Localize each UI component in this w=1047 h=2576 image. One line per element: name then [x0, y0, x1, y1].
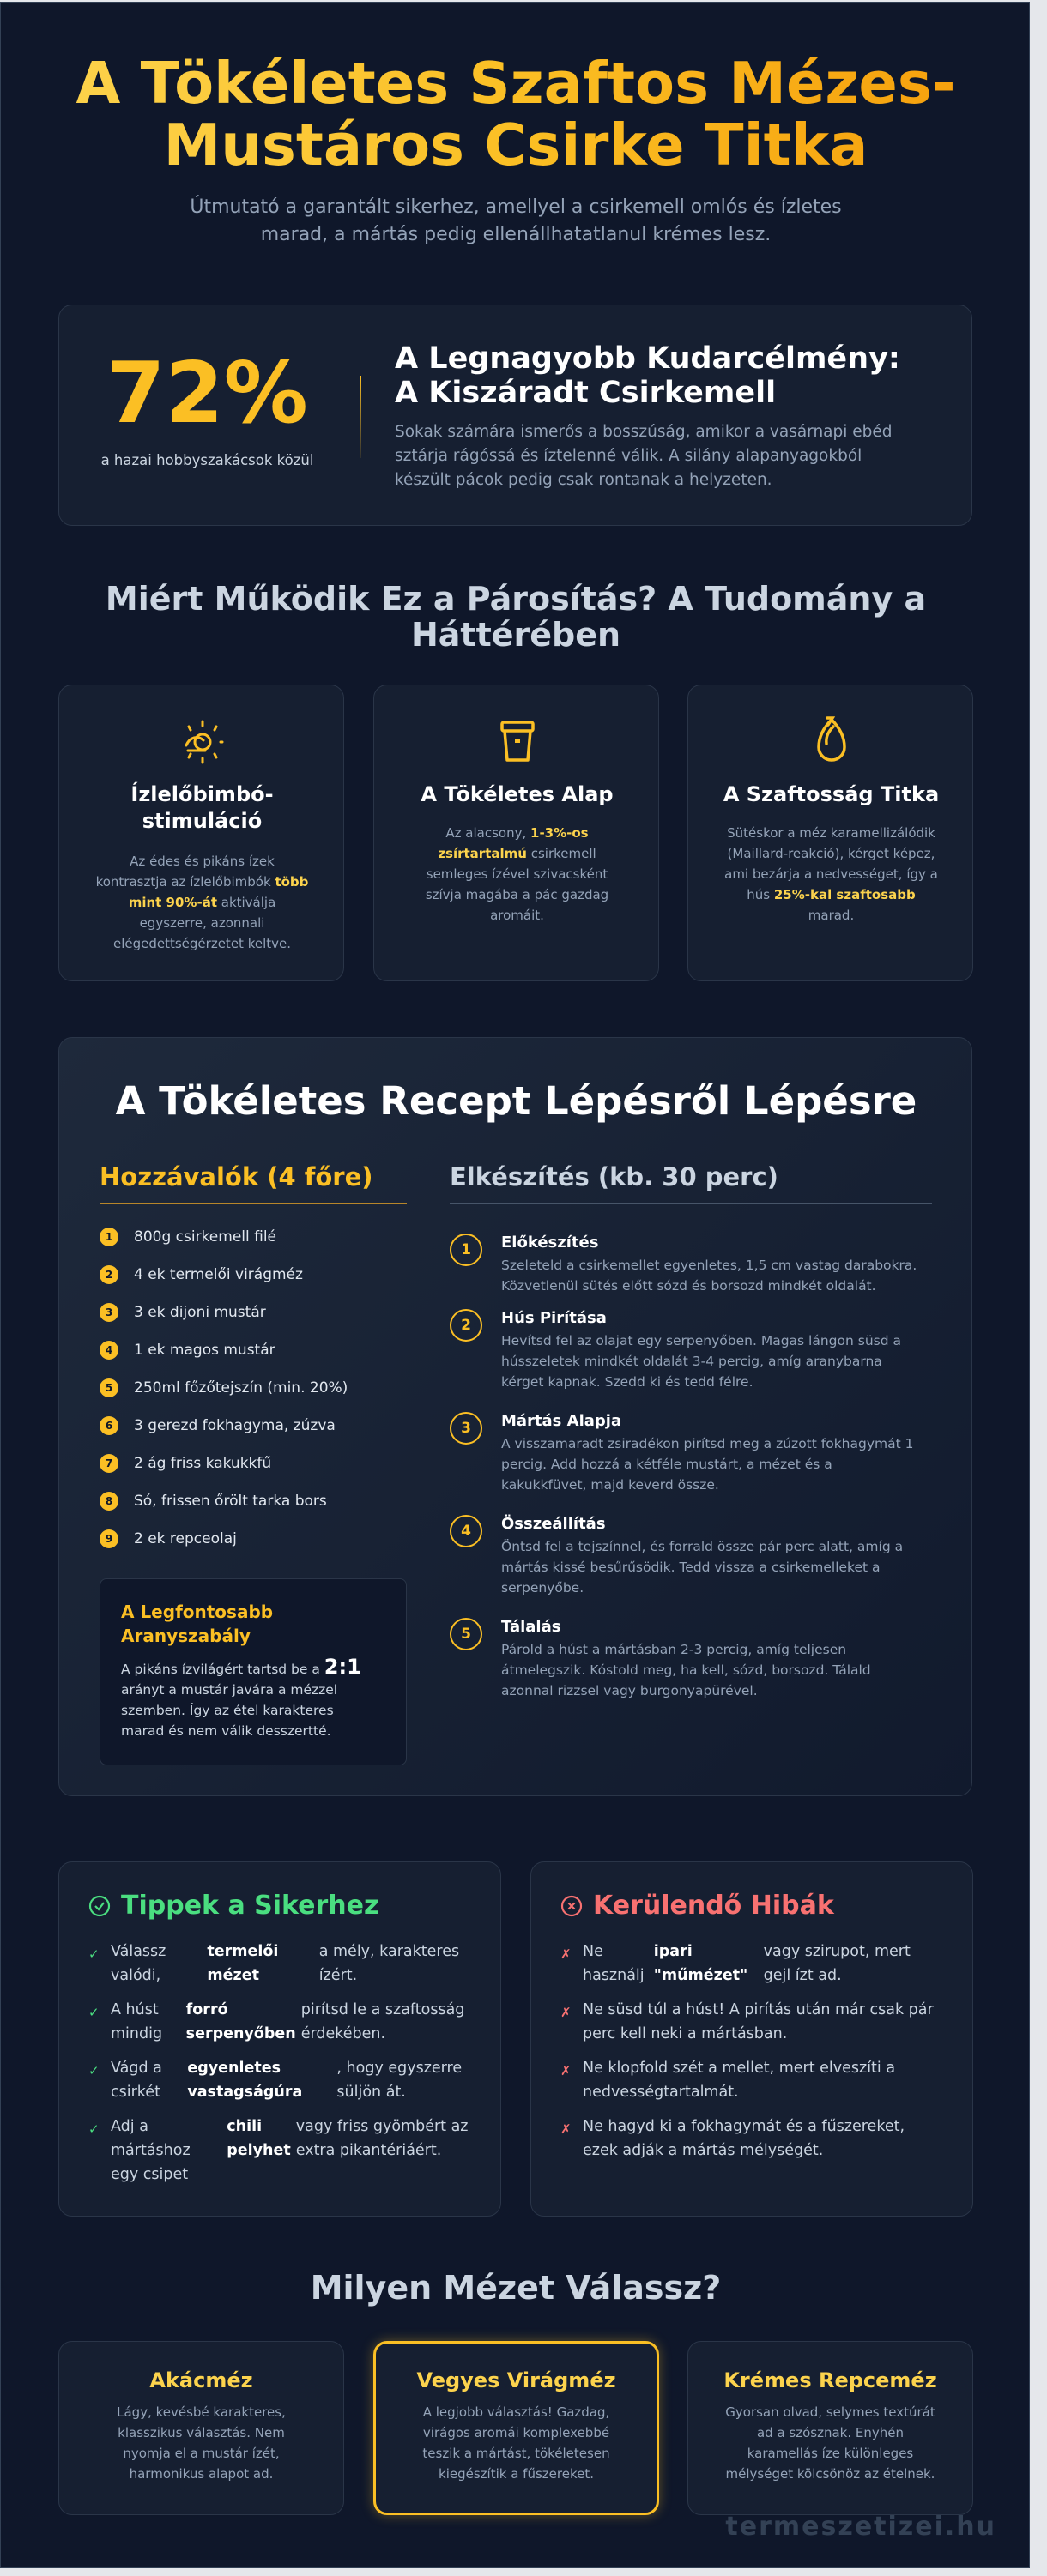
step 2: 2 — [461, 1317, 471, 1334]
title: A Tökéletes Szaftos Mézes-Mustáros Csirke Titka — [76, 50, 956, 178]
panel: rapeseed honey: Krémes Repceméz — [723, 2368, 937, 2392]
ingredients list: 2 ek repceolaj — [134, 1530, 237, 1547]
ingredients list: 4 — [106, 1344, 112, 1356]
subtitle: Útmutató a garantált sikerhez, amellyel a csirkemell omlós és ízletes — [190, 196, 842, 218]
step 1 — [450, 1234, 917, 1294]
mistakes heading: Kerülendő Hibák — [593, 1891, 834, 1921]
ingredients list: 7 — [106, 1457, 112, 1469]
panel: rapeseed honey: ad a szósznak. Enyhén — [757, 2425, 904, 2440]
panel: statistic — [58, 305, 972, 526]
step 2: Hevítsd fel az olajat egy serpenyőben. Magas lángon süsd a hússzeletek mindkét oldalát 3-4 percig, amíg aranybarna kérget kapnak. Szedd ki és tedd félre. — [501, 1333, 901, 1390]
mistakes list: ✗ — [560, 2063, 572, 2078]
steps heading: Elkészítés (kb. 30 perc) — [450, 1162, 778, 1191]
steps heading — [450, 1161, 932, 1204]
step 2 — [450, 1309, 901, 1390]
ingredients list: 3 gerezd fokhagyma, zúzva — [134, 1417, 336, 1434]
stat number: 72% — [106, 345, 308, 443]
panel: juiciness — [687, 685, 973, 981]
card text: marad. — [808, 908, 854, 923]
step 1: 1 — [461, 1241, 471, 1258]
step 5: Párold a húst a mártásban 2-3 percig, amíg teljesen átmelegszik. Kóstold meg, ha kell, sózd, borsozd. Tálald azonnal rizzsel vagy burgonyapürével. — [501, 1642, 871, 1698]
panel: recipe: Mártás Alapja — [501, 1412, 621, 1430]
panel: acacia honey: Akácméz — [149, 2368, 253, 2392]
mistakes list: Ne süsd túl a húst! A pirítás után már csak pár perc kell neki a mártásban. — [583, 2001, 934, 2042]
tips list: Válassz valódi, a mély, karakteres ízért. — [111, 1943, 459, 1984]
tips list: egyenletes vastagságúra — [187, 2060, 302, 2101]
mistakes list: ✗ — [560, 1946, 572, 1962]
card text: egyszerre, azonnali — [140, 915, 264, 931]
card title: A Szaftosság Titka — [723, 782, 939, 806]
tips list: termelői mézet — [207, 1943, 278, 1984]
panel: mistakes — [530, 1861, 973, 2217]
divider — [360, 376, 361, 458]
step 3: A visszamaradt zsiradékon pirítsd meg a zúzott fokhagymát 1 percig. Add hozzá a kétféle mustárt, a mézet és a kakukkfüvet, majd keverd össze. — [501, 1436, 913, 1493]
tips list: forró serpenyőben — [186, 2001, 296, 2042]
callout: golden rule: A Legfontosabb Aranyszabály — [121, 1602, 273, 1646]
panel: recipe: Tálalás — [501, 1618, 560, 1636]
icon: jar — [500, 721, 535, 762]
mistakes list: ✗ — [560, 2005, 572, 2020]
mistakes list: ipari "műmézet" — [654, 1943, 747, 1984]
tips list: ✓ — [88, 2121, 100, 2137]
ingredients list: 2 ág friss kakukkfű — [134, 1455, 271, 1472]
recipe title: A Tökéletes Recept Lépésről Lépésre — [116, 1078, 917, 1124]
step 3: 3 — [461, 1420, 471, 1437]
panel: rapeseed honey: karamellás íze különleges — [747, 2446, 913, 2461]
honey heading: Milyen Mézet Válassz? — [311, 2269, 721, 2307]
tips list: ✓ — [88, 2063, 100, 2078]
panel: recipe: Összeállítás — [501, 1515, 606, 1533]
mistakes list: ✗ — [560, 2121, 572, 2137]
mistakes list: Ne hagyd ki a fokhagymát és a fűszereket, ezek adják a mártás mélységét. — [583, 2118, 905, 2159]
panel: tips — [58, 1861, 501, 2217]
card text: Az alacsony, 1-3%-os zsírtartalmú csirkemell semleges ízével szivacsként szívja magába a pác gazdag aromáit. — [426, 825, 608, 923]
card text: Az édes és pikáns ízek — [130, 854, 275, 869]
card text: elégedettségérzetet keltve. — [113, 936, 291, 951]
science heading: Miért Működik Ez a Párosítás? A Tudomány a Háttérében — [106, 580, 926, 654]
tips list: Vágd a csirkét , hogy egyszerre süljön át. — [111, 2060, 462, 2101]
callout: golden rule: A pikáns ízvilágért tartsd be a 2:1 arányt a mustár javára a mézzel szemben. Így az étel karakteres marad és nem válik desszertté. — [121, 1655, 361, 1739]
step 5: 5 — [461, 1626, 471, 1643]
card text: Sütéskor a méz karamellizálódik (Maillard-reakció), kérget képez, ami bezárja a nedvességet, így a hús 25%-kal szaftosabb — [724, 825, 938, 902]
tips list: chili pelyhet — [227, 2118, 291, 2159]
panel: recipe — [58, 1037, 972, 1796]
ingredients list: 8 — [106, 1495, 112, 1507]
panel: acacia honey — [58, 2341, 344, 2515]
panel: recipe: Előkészítés — [501, 1234, 598, 1252]
tips list — [88, 1943, 469, 2183]
ingredients list: 1 ek magos mustár — [134, 1342, 275, 1359]
stat heading — [395, 341, 900, 410]
step 3 — [450, 1412, 913, 1493]
panel: rapeseed honey: Gyorsan olvad, selymes textúrát — [725, 2404, 935, 2420]
stat heading: A Legnagyobb Kudarcélmény: — [395, 341, 900, 376]
subtitle — [190, 195, 842, 245]
tips heading: Tippek a Sikerhez — [121, 1891, 378, 1921]
card title: A Tökéletes Alap — [421, 782, 614, 806]
tips list: Adj a mártáshoz egy csipet vagy friss gyömbért az extra pikantériáért. — [111, 2118, 469, 2183]
mistakes list — [560, 1943, 934, 2159]
step 4 — [450, 1515, 903, 1596]
mistakes list: Ne klopfold szét a mellet, mert elveszíti a nedvességtartalmát. — [583, 2060, 895, 2101]
subtitle: marad, a mártás pedig ellenállhatatlanul krémes lesz. — [261, 224, 771, 245]
ingredients list: 1 — [106, 1231, 112, 1243]
stat caption: a hazai hobbyszakácsok közül — [101, 452, 313, 468]
ingredients list: 4 ek termelői virágméz — [134, 1266, 303, 1283]
panel: base — [373, 685, 659, 981]
card title: Ízlelőbimbó-stimuláció — [130, 782, 274, 833]
panel: rapeseed honey: mélységet kölcsönöz az ételnek. — [726, 2466, 935, 2482]
ingredients list: 250ml főzőtejszín (min. 20%) — [134, 1379, 348, 1397]
step 4: 4 — [461, 1523, 471, 1540]
ingredients list: 2 — [106, 1269, 112, 1281]
step 5 — [450, 1618, 871, 1698]
panel: recipe: Hús Pirítása — [501, 1309, 607, 1327]
tips list: A húst mindig pirítsd le a szaftosság érdekében. — [111, 2001, 464, 2042]
watermark: termeszetizei.hu — [725, 2512, 996, 2542]
stat heading: A Kiszáradt Csirkemell — [395, 376, 776, 410]
stat text: Sokak számára ismerős a bosszúság, amikor a vasárnapi ebéd sztárja rágóssá és íztelenné válik. A silány alapanyagokból készült pácok pedig csak rontanak a helyzeten. — [395, 423, 893, 489]
mistakes list: Ne használj vagy szirupot, mert gejl ízt ad. — [583, 1943, 911, 1984]
callout: golden rule — [100, 1578, 407, 1765]
ingredients heading: Hozzávalók (4 főre) — [100, 1162, 373, 1191]
card text: kontrasztja az ízlelőbimbók több — [96, 874, 308, 890]
panel: mixed flower honey: A legjobb választás! Gazdag, virágos aromái komplexebbé teszik a mártást, tökéletesen kiegészítik a fűszereket. — [422, 2404, 610, 2482]
panel: mixed flower honey — [373, 2341, 659, 2515]
ingredients list: 3 — [106, 1306, 112, 1318]
panel: taste buds — [58, 685, 344, 981]
card text: mint 90%-át aktiválja — [129, 895, 275, 910]
ingredients list: 800g csirkemell filé — [134, 1228, 276, 1246]
tips list: ✓ — [88, 2005, 100, 2020]
panel: acacia honey: Lágy, kevésbé karakteres, klasszikus választás. Nem nyomja el a mustár ízét, harmonikus alapot ad. — [117, 2404, 286, 2482]
icon: flame — [817, 716, 846, 762]
icon: sun — [185, 721, 223, 763]
ingredients list: 5 — [106, 1382, 112, 1394]
ingredients list: 3 ek dijoni mustár — [134, 1304, 266, 1321]
tips list: ✓ — [88, 1946, 100, 1962]
ingredients list: Só, frissen őrölt tarka bors — [134, 1493, 327, 1510]
step 4: Öntsd fel a tejszínnel, és forrald össze pár perc alatt, amíg a mártás kissé besűrűsödik. Tedd vissza a csirkemelleket a serpenyőbe. — [501, 1539, 903, 1596]
ingredients list — [100, 1228, 348, 1548]
panel: mixed flower honey: Vegyes Virágméz — [416, 2368, 616, 2392]
ingredients list: 6 — [106, 1420, 112, 1432]
step 1: Szeleteld a csirkemellet egyenletes, 1,5 cm vastag darabokra. Közvetlenül sütés előtt sózd és borsozd mindkét oldalát. — [501, 1258, 917, 1294]
panel: rapeseed honey — [687, 2341, 973, 2515]
ingredients heading — [100, 1161, 407, 1204]
ingredients list: 9 — [106, 1533, 112, 1545]
card text — [96, 854, 308, 951]
